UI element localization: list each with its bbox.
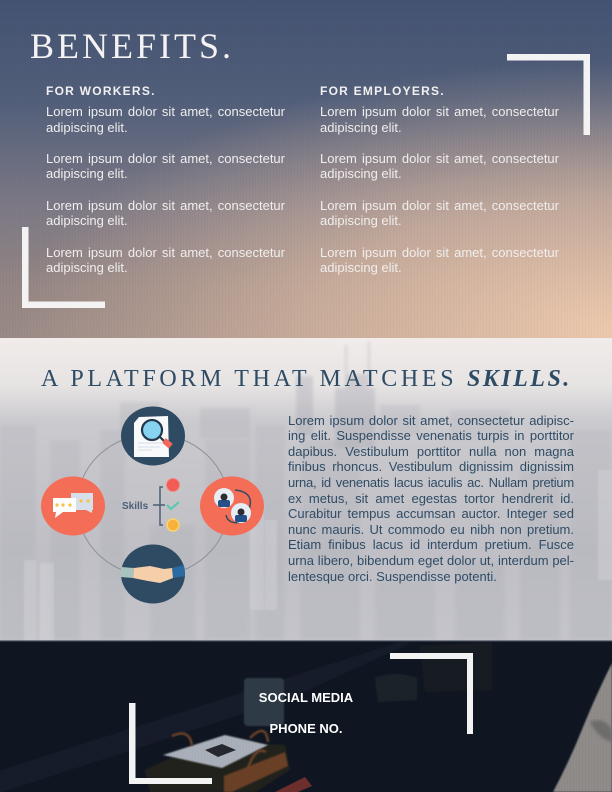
icon: review speech bubbles: [41, 476, 105, 536]
text block: platform description: ing elit. Suspendisse venenatis turpis in porttitor: [288, 428, 574, 443]
contact: social media: SOCIAL MEDIA: [259, 690, 353, 705]
text block: platform description: [288, 412, 574, 584]
column: for employers: adipiscing elit.: [320, 260, 402, 275]
contact: phone number: PHONE NO.: [270, 721, 342, 736]
text block: platform description: Lorem ipsum dolor sit amet, consectetur adipisc-: [288, 412, 574, 428]
column: for workers: adipiscing elit.: [46, 213, 128, 228]
icon: handshake: [121, 544, 185, 604]
text block: platform description: dapibus. Vestibulum porttitor nulla non magna: [288, 444, 574, 459]
heading: for employers: FOR EMPLOYERS.: [320, 84, 445, 98]
corner bracket: footer right: [390, 653, 473, 734]
column: for workers: adipiscing elit.: [46, 120, 128, 135]
title: benefits: BENEFITS.: [30, 26, 234, 66]
text block: platform description: lentesque orci. Suspendisse potenti.: [288, 568, 497, 584]
label: skills with bracket and marks: Skills: [122, 501, 149, 512]
text block: platform description: urna, id venenatis lacus iaculis ac. Nullam pretium: [288, 475, 574, 490]
text block: platform description: urna libero, bibendum eget dolor ut, interdum pel-: [288, 553, 574, 568]
icon: document search: [121, 406, 185, 466]
column: for employers: Lorem ipsum dolor sit amet, consectetur: [320, 104, 559, 119]
column: for workers: Lorem ipsum dolor sit amet, consectetur: [46, 151, 285, 166]
text block: platform description: nunc mauris. Ut commodo eu nibh non pretium.: [288, 522, 574, 537]
column: for employers: adipiscing elit.: [320, 213, 402, 228]
column: for employers: Lorem ipsum dolor sit amet, consectetur: [320, 245, 559, 260]
connecting ring: [77, 434, 229, 576]
column: for employers: [320, 84, 559, 275]
column: for employers: adipiscing elit.: [320, 166, 402, 181]
column: for employers: Lorem ipsum dolor sit amet, consectetur: [320, 151, 559, 166]
diagram: skills cycle: [41, 406, 264, 604]
heading: a platform that matches skills: A PLATFORM THAT MATCHES SKILLS.: [41, 366, 572, 392]
column: for workers: Lorem ipsum dolor sit amet, consectetur: [46, 198, 285, 213]
label: skills with bracket and marks: [122, 478, 180, 531]
text block: platform description: finibus rhoncus. Vestibulum dignissim dignissim: [288, 459, 574, 474]
column: for workers: adipiscing elit.: [46, 166, 128, 181]
column: for workers: Lorem ipsum dolor sit amet, consectetur: [46, 245, 285, 260]
text block: platform description: Etiam finibus lacus id interdum pretium. Fusce: [288, 537, 574, 552]
heading: for workers: FOR WORKERS.: [46, 84, 156, 98]
column: for workers: adipiscing elit.: [46, 260, 128, 275]
column: for workers: Lorem ipsum dolor sit amet, consectetur: [46, 104, 285, 119]
column: for employers: adipiscing elit.: [320, 120, 402, 135]
column: for workers: [46, 84, 285, 275]
column: for employers: Lorem ipsum dolor sit amet, consectetur: [320, 198, 559, 213]
text block: platform description: Curabitur tempus accumsan auctor. Integer sed: [288, 506, 574, 521]
corner bracket: top right: [507, 54, 590, 135]
icon: people exchange: [200, 476, 264, 536]
corner bracket: upper left: [22, 227, 105, 308]
corner bracket: footer left: [129, 703, 212, 784]
footer city details: [0, 642, 612, 792]
text block: platform description: ex metus, sit amet egestas tortor hendrerit id.: [288, 490, 574, 506]
